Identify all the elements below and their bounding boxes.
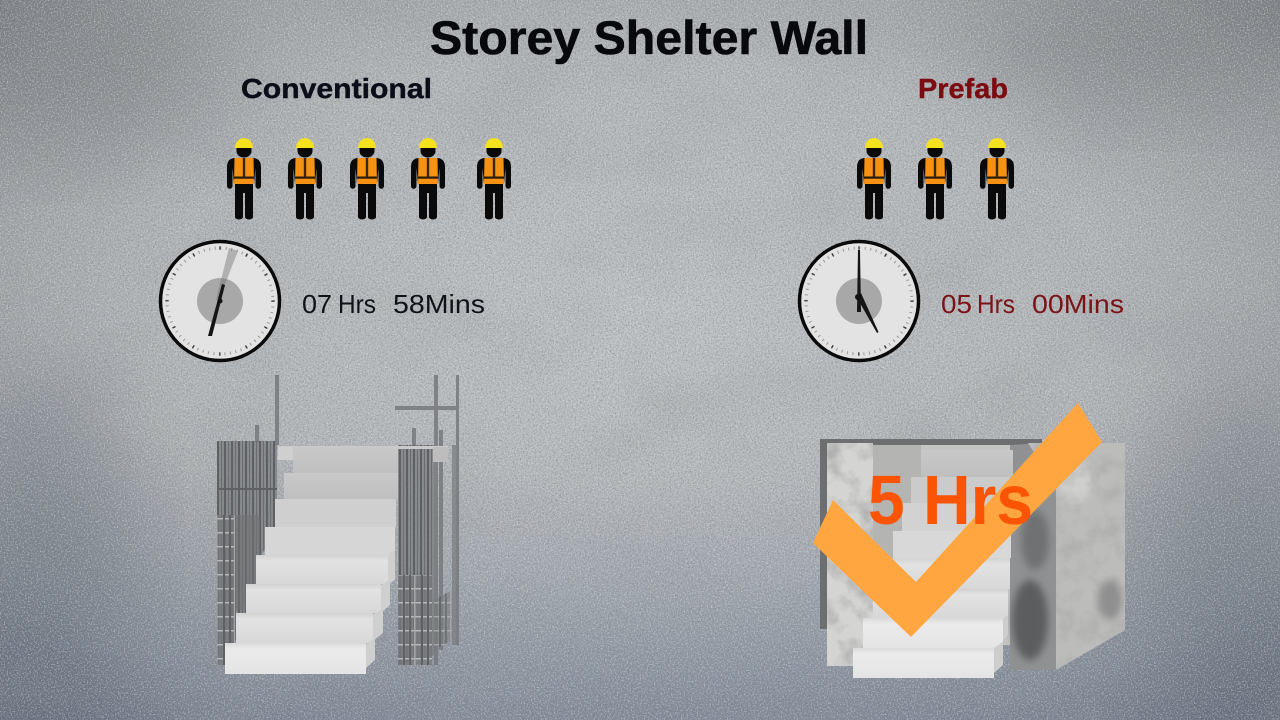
icon: check mark <box>813 403 1102 637</box>
text: conventional time <box>302 289 485 319</box>
right wall <box>1010 443 1056 670</box>
text: prefab time <box>941 289 1124 319</box>
top landing <box>278 446 448 449</box>
heading: Conventional: Conventional <box>241 73 432 104</box>
icons: five workers, conventional crew <box>227 138 511 220</box>
callout: 5 Hrs: 5 Hrs <box>868 461 1033 539</box>
icon: stopwatch conventional <box>160 242 280 360</box>
text: conventional time: 07 <box>302 289 332 319</box>
icon: stopwatch prefab <box>800 242 918 360</box>
rebar cage left <box>217 441 277 665</box>
text: prefab time: Hrs <box>977 289 1015 319</box>
text: prefab time: 05 <box>941 289 972 319</box>
text: conventional time: 58Mins <box>393 289 485 319</box>
heading: Prefab: Prefab <box>918 73 1008 104</box>
text: conventional time: Hrs <box>338 289 376 319</box>
illustration: conventional stairs with rebar <box>217 375 459 674</box>
rebar cage right <box>398 445 434 665</box>
stair side faces <box>994 615 1008 673</box>
stair side faces <box>366 550 395 668</box>
illustration: prefab stairs with concrete walls <box>820 439 1125 678</box>
title: Storey Shelter Wall <box>430 11 868 64</box>
left wall <box>827 443 873 666</box>
back wall <box>820 439 1042 629</box>
icons: three workers, prefab crew <box>857 138 1014 220</box>
stair steps <box>853 450 1013 678</box>
text: prefab time: 00Mins <box>1032 289 1124 319</box>
rebar poles <box>255 375 459 665</box>
stair steps <box>225 447 398 674</box>
